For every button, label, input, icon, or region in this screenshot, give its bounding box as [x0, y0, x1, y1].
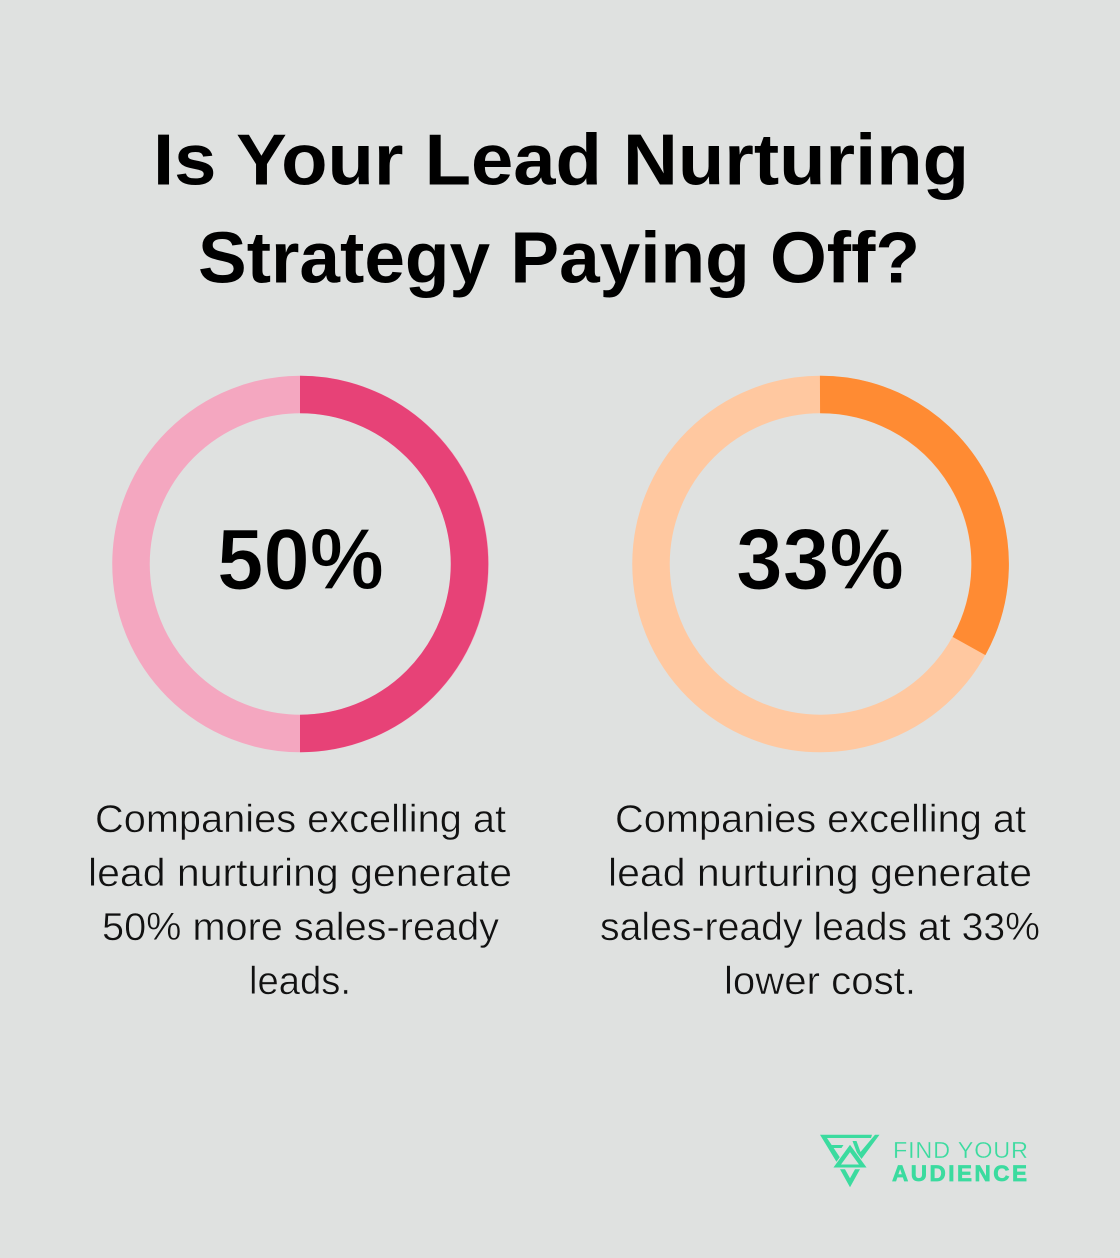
- description: 50% stat: leads.: [249, 960, 351, 1003]
- logo: Find Your Audience: [820, 1135, 1028, 1187]
- description: 50% stat: [88, 798, 512, 1003]
- icon: triangles mark: [820, 1135, 880, 1187]
- panel: 50% stat: [88, 394, 512, 1003]
- description: 50% stat: lead nurturing generate: [88, 852, 512, 895]
- value: 33%: 33%: [736, 512, 904, 608]
- wordmark: AUDIENCE: [892, 1161, 1027, 1186]
- description: 33% stat: lead nurturing generate: [608, 852, 1032, 895]
- wordmark: FIND YOUR: [893, 1137, 1028, 1163]
- donut chart: 33%: [651, 394, 990, 734]
- panel: 33% stat: [600, 394, 1040, 1003]
- donut chart: 50%: [131, 394, 470, 734]
- description: 33% stat: sales-ready leads at 33%: [600, 906, 1040, 949]
- description: 33% stat: lower cost.: [724, 960, 916, 1003]
- title: Is Your Lead Nurturing: [153, 120, 969, 200]
- description: 33% stat: [600, 798, 1040, 1003]
- title: [153, 120, 969, 298]
- wordmark: [892, 1137, 1028, 1186]
- title: Strategy Paying Off?: [198, 218, 920, 298]
- description: 50% stat: 50% more sales-ready: [102, 906, 500, 949]
- value: 50%: 50%: [217, 512, 384, 608]
- description: 50% stat: Companies excelling at: [95, 798, 506, 841]
- description: 33% stat: Companies excelling at: [615, 798, 1026, 841]
